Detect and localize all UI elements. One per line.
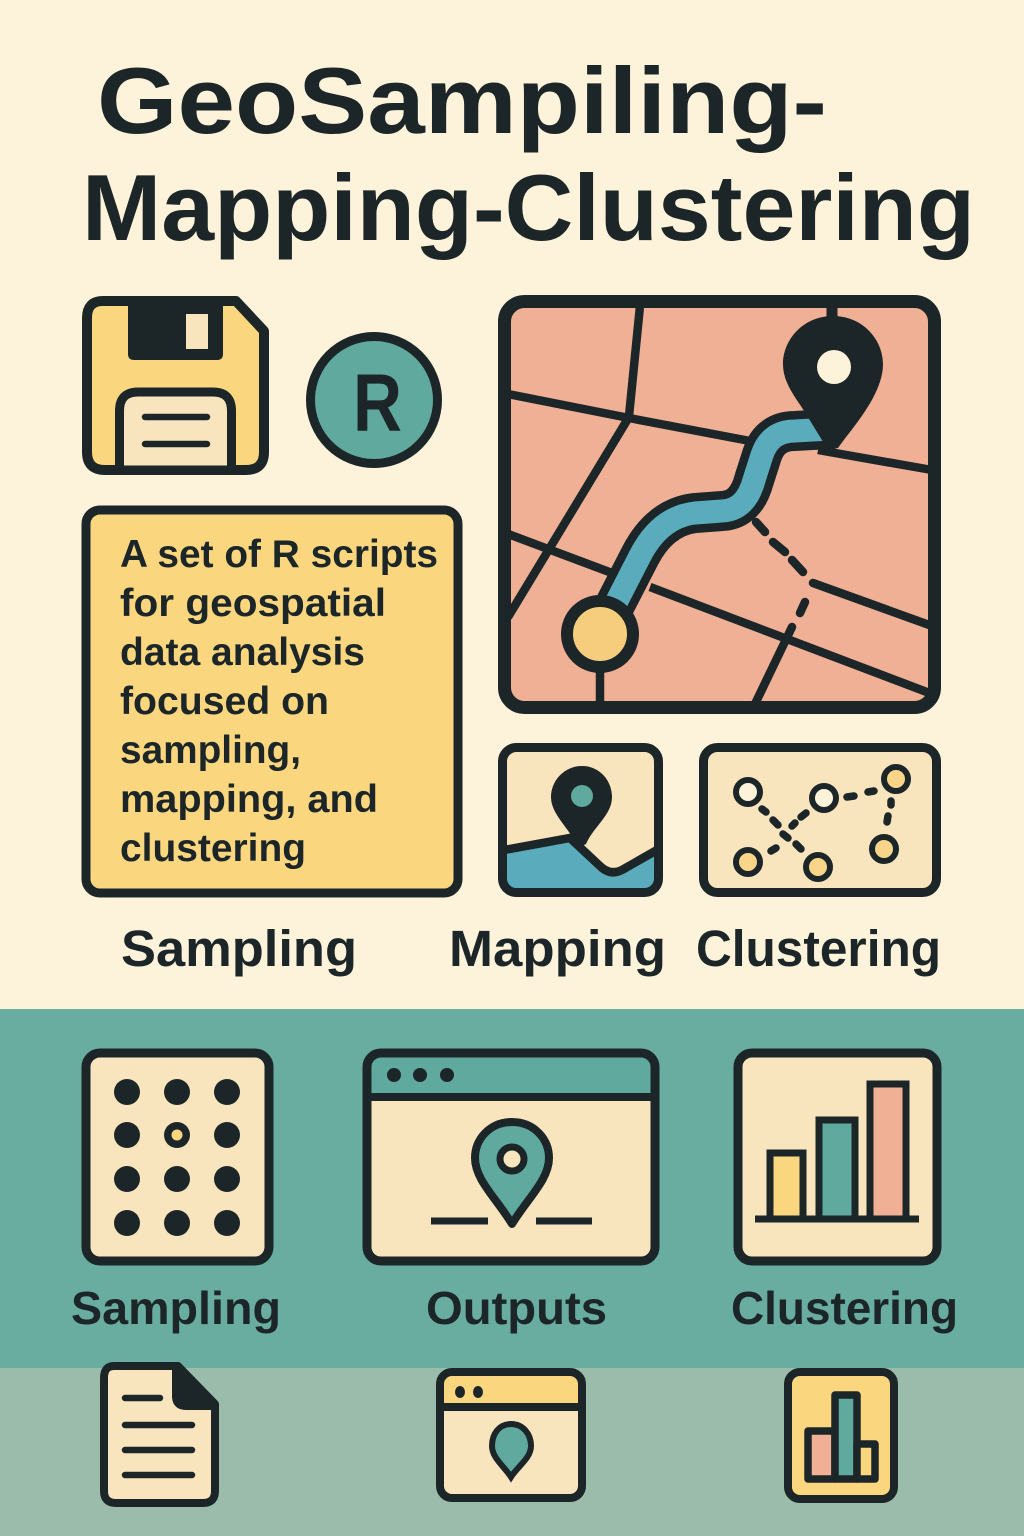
labels: bottom row <box>71 1282 958 1334</box>
icon: small bar chart <box>788 1372 894 1499</box>
dashed route <box>756 522 805 613</box>
title: Mapping-Clustering <box>82 155 975 260</box>
labels row: Mapping <box>449 920 666 977</box>
description text <box>120 533 438 870</box>
labels: bottom row: Outputs <box>426 1282 607 1334</box>
icon: R logo <box>310 336 438 464</box>
description text: for geospatial <box>120 582 386 625</box>
icon: outputs window <box>367 1053 655 1261</box>
title <box>82 48 975 260</box>
panel: description <box>86 510 458 893</box>
title: GeoSampiling- <box>97 48 827 153</box>
icon: small window <box>440 1372 582 1498</box>
map roads <box>508 304 932 704</box>
icon: clustering bar chart <box>738 1053 937 1261</box>
icon: floppy disk <box>87 301 264 470</box>
labels row <box>121 920 941 977</box>
map panel <box>504 301 935 708</box>
description text: sampling, <box>120 729 301 772</box>
description text: clustering <box>120 827 306 870</box>
labels row: Sampling <box>121 920 357 977</box>
icon: mapping <box>502 747 659 892</box>
labels row: Clustering <box>696 920 941 977</box>
route <box>603 429 830 628</box>
description text: mapping, and <box>120 778 378 821</box>
description text: data analysis <box>120 631 365 674</box>
start marker <box>567 601 633 667</box>
icon: R logo: R <box>353 358 402 449</box>
labels: bottom row: Clustering <box>731 1282 958 1334</box>
icon: document <box>104 1366 215 1503</box>
labels: bottom row: Sampling <box>71 1282 281 1334</box>
description text: focused on <box>120 680 329 723</box>
location pin <box>783 316 883 450</box>
description text: A set of R scripts <box>120 533 438 576</box>
icon: clustering network <box>704 748 936 892</box>
icon: sampling dots <box>86 1053 269 1261</box>
